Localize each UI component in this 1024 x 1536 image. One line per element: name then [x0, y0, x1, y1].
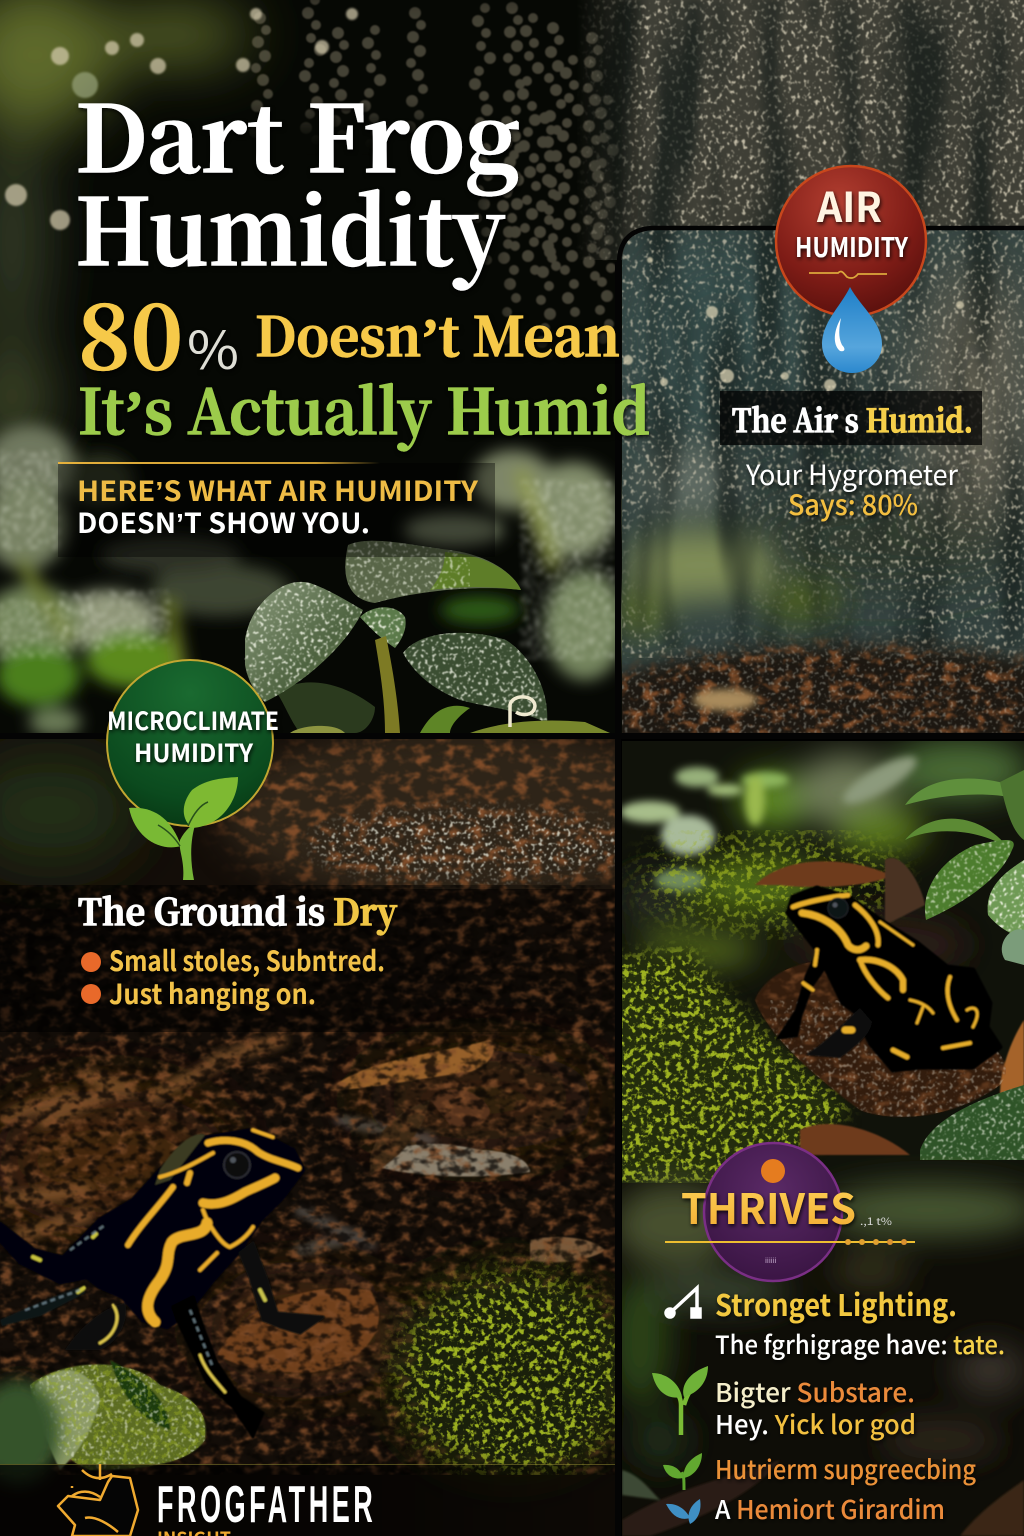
item: nutrient supporting: Hutrierm supgreecbing [715, 1450, 976, 1487]
panel: thriving habitat background [610, 740, 1024, 1536]
badge: air humidity [776, 166, 926, 373]
icon: frogfather logo [58, 1464, 138, 1536]
title: Humidity [75, 160, 505, 292]
badge: thrives [665, 1143, 915, 1281]
icon: sprout [129, 777, 238, 880]
text: hygrometer reading [745, 454, 958, 524]
panel: ground caption band: Just hanging on. [109, 973, 316, 1013]
panel: ground caption band: Dry [333, 885, 397, 936]
footer: brand band: FROGFATHER [157, 1474, 373, 1533]
subtitle: 80% doesn't mean [78, 265, 620, 395]
panel: ground caption band [0, 885, 615, 1032]
badge: thrives: iiiiii [765, 1256, 777, 1266]
item: stronger lighting: The fgrhigrage have: tate. [715, 1326, 1005, 1362]
icon: small sprout [663, 1453, 702, 1490]
top-right condensation [560, 0, 1024, 260]
panel: hero rainforest background [0, 0, 1024, 736]
item: bigger substrate: Bigter Substare. [715, 1373, 915, 1410]
badge: air humidity: AIR [816, 174, 882, 234]
icon: blue leaves [666, 1499, 701, 1524]
intro callout: DOESN’T SHOW YOU. [77, 502, 370, 542]
icon: water drop [822, 287, 882, 373]
badge: thrives: THRIVES [681, 1176, 856, 1237]
leaf litter under frog [755, 858, 1024, 1155]
text: hygrometer reading: Your Hygrometer [745, 454, 958, 494]
item: bigger substrate [652, 1366, 916, 1442]
subtitle: 80% doesn't mean: % [187, 309, 239, 384]
item: bigger substrate: Hey. Yick lor god [715, 1405, 916, 1442]
icon: sprout green [652, 1366, 708, 1435]
panel: ground caption band: The Ground is [78, 885, 325, 936]
icon: frog on forest floor [775, 888, 1000, 1070]
panel: air humidity background [610, 228, 1024, 733]
footer: brand band [0, 1464, 615, 1536]
title [75, 67, 520, 292]
badge: microclimate humidity: HUMIDITY [134, 734, 253, 770]
badge: air humidity: HUMIDITY [795, 226, 908, 265]
title: Dart Frog [75, 67, 520, 199]
item: stronger lighting: Stronget Lighting. [715, 1281, 957, 1325]
panel: ground microclimate background [0, 739, 620, 1536]
icon: lighting arrow [666, 1288, 700, 1317]
intro callout: HERE’S WHAT AIR HUMIDITY [77, 470, 479, 510]
glossy leaves [905, 770, 1024, 1160]
subtitle: 80% doesn't mean: 80 [78, 265, 183, 395]
badge: microclimate humidity [107, 660, 279, 880]
foliage [0, 425, 625, 736]
subtitle: 80% doesn't mean: Doesn’t Mean [255, 295, 620, 372]
text: the air is humid: The Air s Humid. [732, 396, 973, 442]
lower blurred section [610, 1183, 1024, 1536]
mossy stone [30, 1360, 206, 1470]
leaf litter flakes [217, 1040, 605, 1373]
item: stronger lighting [666, 1281, 1005, 1362]
subtitle: actually humid: It’s Actually Humid [78, 363, 650, 452]
badge: thrives: .,1 t% [860, 1213, 892, 1228]
icon: frog on leaf litter [0, 1130, 323, 1437]
item: a hemiort girardim: A Hemiort Girardim [715, 1490, 945, 1527]
bokeh raindrop strands [249, 0, 619, 387]
badge: microclimate humidity: MICROCLIMATE [107, 702, 279, 738]
intro callout [58, 462, 495, 557]
text: hygrometer reading: Says: 80% [788, 484, 918, 524]
panel: ground caption band: Small stoles, Subntred. [109, 940, 385, 980]
large foreground leaves [235, 535, 610, 733]
